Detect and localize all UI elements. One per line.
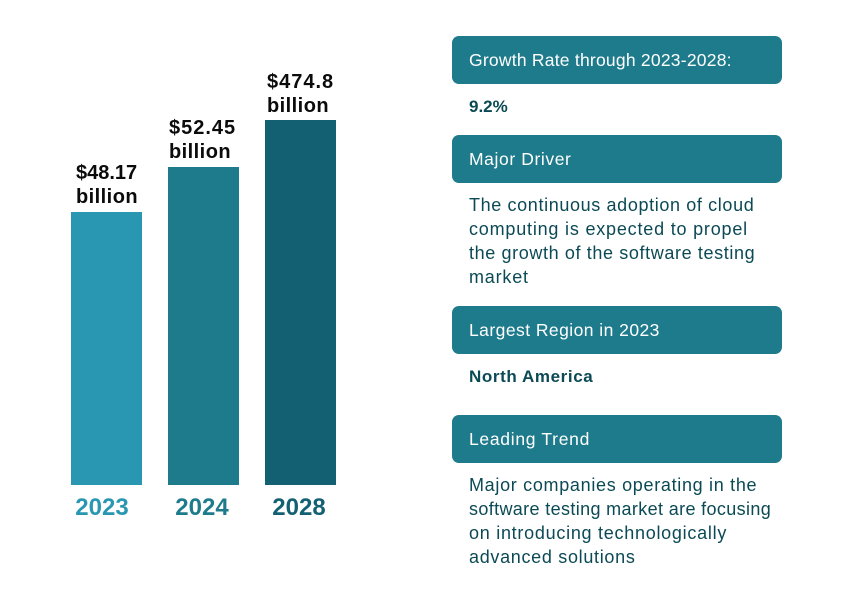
text: major driver: market	[469, 267, 529, 287]
text: leading trend: software testing market are focusing	[469, 499, 771, 519]
value 2028	[267, 71, 334, 117]
heading: leading trend	[452, 415, 782, 463]
text: major driver: The continuous adoption of cloud	[469, 195, 754, 215]
bar 2028	[265, 120, 336, 485]
heading: leading trend: Leading Trend	[469, 429, 590, 449]
text: leading trend: on introducing technologically	[469, 523, 727, 543]
value 2024: billion	[169, 141, 231, 163]
year 2023: 2023	[75, 494, 129, 521]
heading: largest region: Largest Region in 2023	[469, 320, 660, 340]
bar 2023	[71, 212, 142, 485]
value 2024	[169, 117, 236, 163]
text: largest region: North America	[469, 367, 593, 386]
heading: major driver	[452, 135, 782, 183]
value 2028: billion	[267, 95, 329, 117]
value 2023: $48.17	[76, 162, 137, 184]
value 2024: $52.45	[169, 117, 236, 139]
text: growth rate value: 9.2%	[469, 97, 508, 116]
text: major driver	[469, 195, 755, 287]
text: major driver: the growth of the software testing	[469, 243, 755, 263]
bar chart	[71, 71, 336, 521]
heading: major driver: Major Driver	[469, 149, 571, 169]
text: leading trend	[469, 475, 771, 567]
text: major driver: computing is expected to propel	[469, 219, 748, 239]
text: leading trend: advanced solutions	[469, 547, 636, 567]
value 2023	[76, 162, 138, 208]
value 2028: $474.8	[267, 71, 334, 93]
bar 2024	[168, 167, 239, 485]
year 2028: 2028	[272, 494, 326, 521]
heading: growth rate	[452, 36, 782, 84]
year 2024: 2024	[175, 494, 229, 521]
heading: growth rate: Growth Rate through 2023-2028:	[469, 50, 732, 70]
text: leading trend: Major companies operating in the	[469, 475, 757, 495]
value 2023: billion	[76, 186, 138, 208]
heading: largest region	[452, 306, 782, 354]
